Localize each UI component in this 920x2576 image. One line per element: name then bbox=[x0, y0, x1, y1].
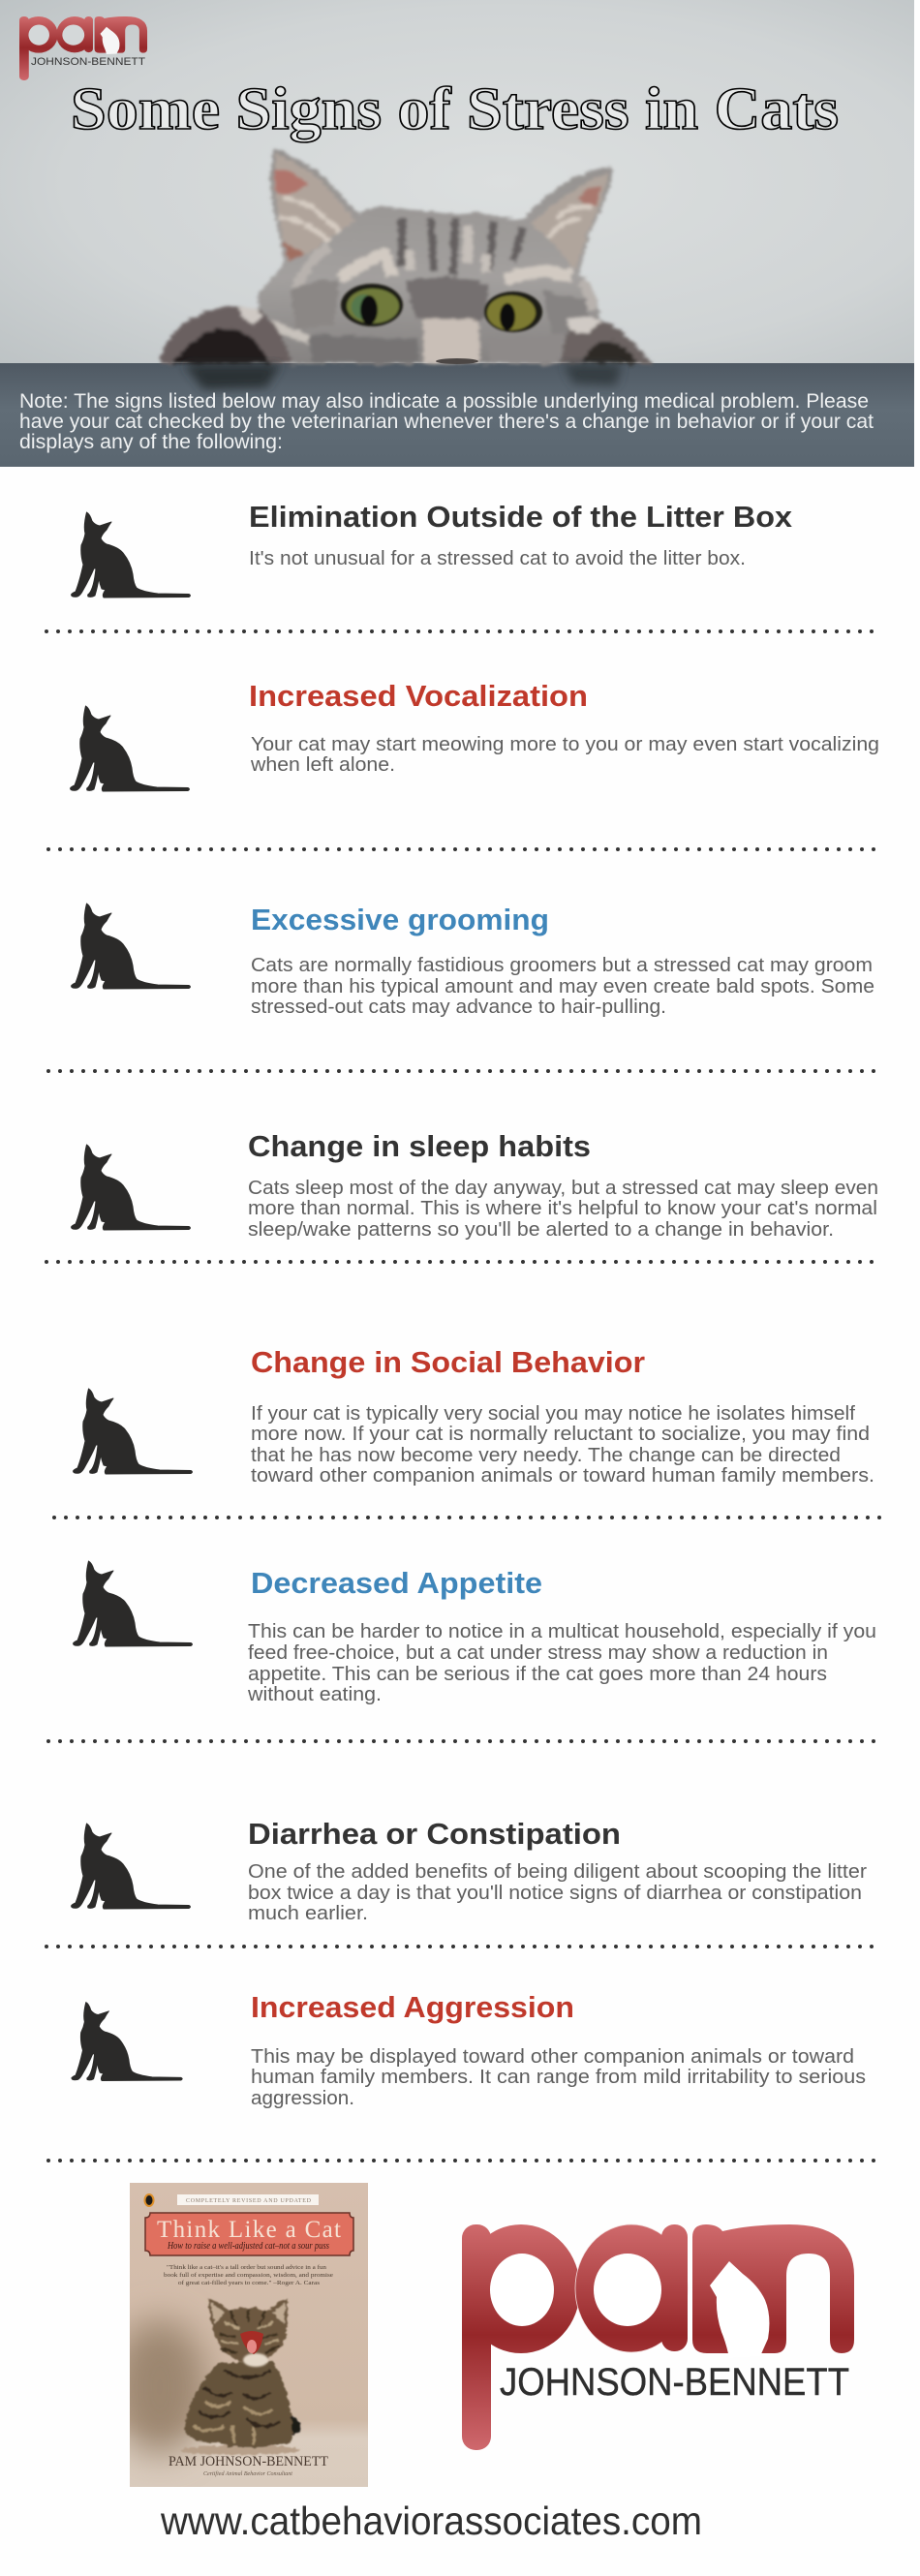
icon: cat silhouette bbox=[72, 2003, 182, 2081]
icon: cat silhouette bbox=[70, 706, 190, 791]
sign 5: change in social behavior bbox=[74, 1345, 874, 1487]
icon: cat silhouette bbox=[72, 1145, 190, 1230]
book quote: book full of expertise and compassion, wisdom, and promise bbox=[164, 2272, 333, 2279]
sign 3: excessive grooming bbox=[72, 903, 874, 1018]
body text: If your cat is typically very social you may notice he isolates himself bbox=[251, 1403, 855, 1425]
sign 2: increased vocalization bbox=[70, 679, 879, 791]
body text bbox=[251, 955, 874, 1018]
note text: displays any of the following: bbox=[19, 431, 283, 453]
book cover: Think Like a Cat: COMPLETELY REVISED AND UPDATED bbox=[186, 2198, 312, 2204]
nose bbox=[436, 358, 478, 364]
sign 7: diarrhea or constipation bbox=[72, 1817, 867, 1924]
heading: Change in Social Behavior bbox=[251, 1345, 645, 1379]
illustration: peeking cat bbox=[159, 148, 653, 389]
heading: Increased Vocalization bbox=[249, 679, 588, 713]
heading: Elimination Outside of the Litter Box bbox=[249, 500, 793, 534]
body text: Cats sleep most of the day anyway, but a stressed cat may sleep even bbox=[248, 1178, 878, 1199]
edition label bbox=[177, 2194, 319, 2205]
logo letter a bbox=[575, 2224, 688, 2352]
note text bbox=[19, 390, 874, 453]
penguin badge bbox=[143, 2193, 155, 2207]
title: Some Signs of Stress in Cats bbox=[71, 77, 839, 142]
book title plate bbox=[145, 2213, 353, 2255]
icon: cat silhouette bbox=[72, 904, 190, 989]
body text: This may be displayed toward other companion animals or toward bbox=[251, 2046, 854, 2068]
heading: Decreased Appetite bbox=[251, 1566, 542, 1600]
body text: This can be harder to notice in a multicat household, especially if you bbox=[248, 1621, 876, 1642]
body text bbox=[251, 2046, 866, 2109]
icon: cat silhouette bbox=[72, 1824, 190, 1909]
book cover: Think Like a Cat: How to raise a well-adjusted cat–not a sour puss bbox=[167, 2241, 329, 2252]
icon: cat silhouette bbox=[74, 1561, 192, 1646]
heading: Diarrhea or Constipation bbox=[248, 1817, 621, 1851]
heading: Increased Aggression bbox=[251, 1990, 574, 2024]
body text: aggression. bbox=[251, 2088, 354, 2109]
kitten photo bbox=[180, 2298, 301, 2455]
body text: feed free-choice, but a cat under stress may show a reduction in bbox=[248, 1642, 828, 1664]
body text: more now. If your cat is normally reluctant to socialize, you may find bbox=[251, 1424, 870, 1445]
sign 4: change in sleep habits bbox=[72, 1129, 878, 1241]
body text: Cats are normally fastidious groomers but a stressed cat may groom bbox=[251, 955, 873, 976]
logo wordmark: JOHNSON-BENNETT bbox=[500, 2361, 849, 2404]
logo letter m with cat cutout bbox=[692, 2224, 854, 2358]
book quote bbox=[164, 2264, 333, 2286]
paw shadows bbox=[184, 364, 622, 389]
book cover: Think Like a Cat: Certified Animal Behavior Consultant bbox=[203, 2470, 292, 2477]
photo wall bbox=[0, 0, 914, 364]
icon: cat silhouette bbox=[72, 512, 190, 598]
body text: It's not unusual for a stressed cat to avoid the litter box. bbox=[249, 548, 746, 569]
body text: appetite. This can be serious if the cat goes more than 24 hours bbox=[248, 1664, 827, 1685]
kitten mouth bbox=[240, 2331, 263, 2354]
body text: Your cat may start meowing more to you or may even start vocalizing bbox=[251, 734, 879, 755]
heading: Excessive grooming bbox=[251, 903, 549, 936]
note text: Note: The signs listed below may also indicate a possible underlying medical problem. Please bbox=[19, 390, 869, 413]
body text: without eating. bbox=[247, 1684, 382, 1705]
body text: that he has now become very needy. The change can be directed bbox=[251, 1445, 841, 1466]
book quote: "Think like a cat–it's a tall order but sound advice in a fun bbox=[167, 2264, 327, 2271]
website url: www.catbehaviorassociates.com bbox=[160, 2499, 702, 2543]
body text bbox=[248, 1178, 878, 1241]
book cover: Think Like a Cat: Think Like a Cat bbox=[157, 2217, 341, 2243]
left eye bbox=[341, 284, 403, 326]
logo: small header mark: JOHNSON-BENNETT bbox=[31, 56, 145, 68]
panel: hero photo bbox=[0, 0, 914, 467]
body text: box twice a day is that you'll notice signs of diarrhea or constipation bbox=[248, 1883, 862, 1904]
body text: toward other companion animals or toward human family members. bbox=[251, 1465, 874, 1487]
book author: PAM JOHNSON-BENNETT bbox=[169, 2454, 328, 2469]
body text: One of the added benefits of being diligent about scooping the litter bbox=[248, 1861, 867, 1883]
heading: Change in sleep habits bbox=[248, 1129, 591, 1163]
body text: more than normal. This is where it's helpful to know your cat's normal bbox=[248, 1198, 877, 1219]
logo: small header mark bbox=[19, 16, 147, 80]
body text bbox=[250, 734, 879, 776]
body text: when left alone. bbox=[250, 754, 395, 776]
book quote: of great cat-filled years to come." –Roger A. Caras bbox=[178, 2280, 321, 2286]
note text: have your cat checked by the veterinarian whenever there's a change in behavior or if your cat bbox=[19, 411, 874, 433]
sign 8: increased aggression bbox=[72, 1990, 866, 2109]
logo: Pam Johnson-Bennett bbox=[462, 2224, 854, 2450]
sign 1: elimination outside the litter box bbox=[72, 500, 793, 598]
photo table band bbox=[0, 363, 914, 467]
body text bbox=[247, 1621, 876, 1705]
body text: stressed-out cats may advance to hair-pulling. bbox=[251, 997, 666, 1018]
body text bbox=[251, 1403, 874, 1487]
body text: sleep/wake patterns so you'll be alerted to a change in behavior. bbox=[248, 1219, 834, 1241]
body text: more than his typical amount and may even create bald spots. Some bbox=[251, 976, 874, 997]
logo letter p bbox=[462, 2224, 580, 2450]
body text bbox=[248, 1861, 867, 1924]
body text: much earlier. bbox=[248, 1903, 368, 1924]
sign 6: decreased appetite bbox=[74, 1561, 876, 1705]
kitten chest bbox=[243, 2353, 268, 2367]
book cover: Think Like a Cat bbox=[113, 2183, 368, 2487]
body text: human family members. It can range from mild irritability to serious bbox=[251, 2067, 866, 2088]
icon: cat silhouette bbox=[74, 1389, 192, 1474]
right eye bbox=[484, 291, 542, 332]
